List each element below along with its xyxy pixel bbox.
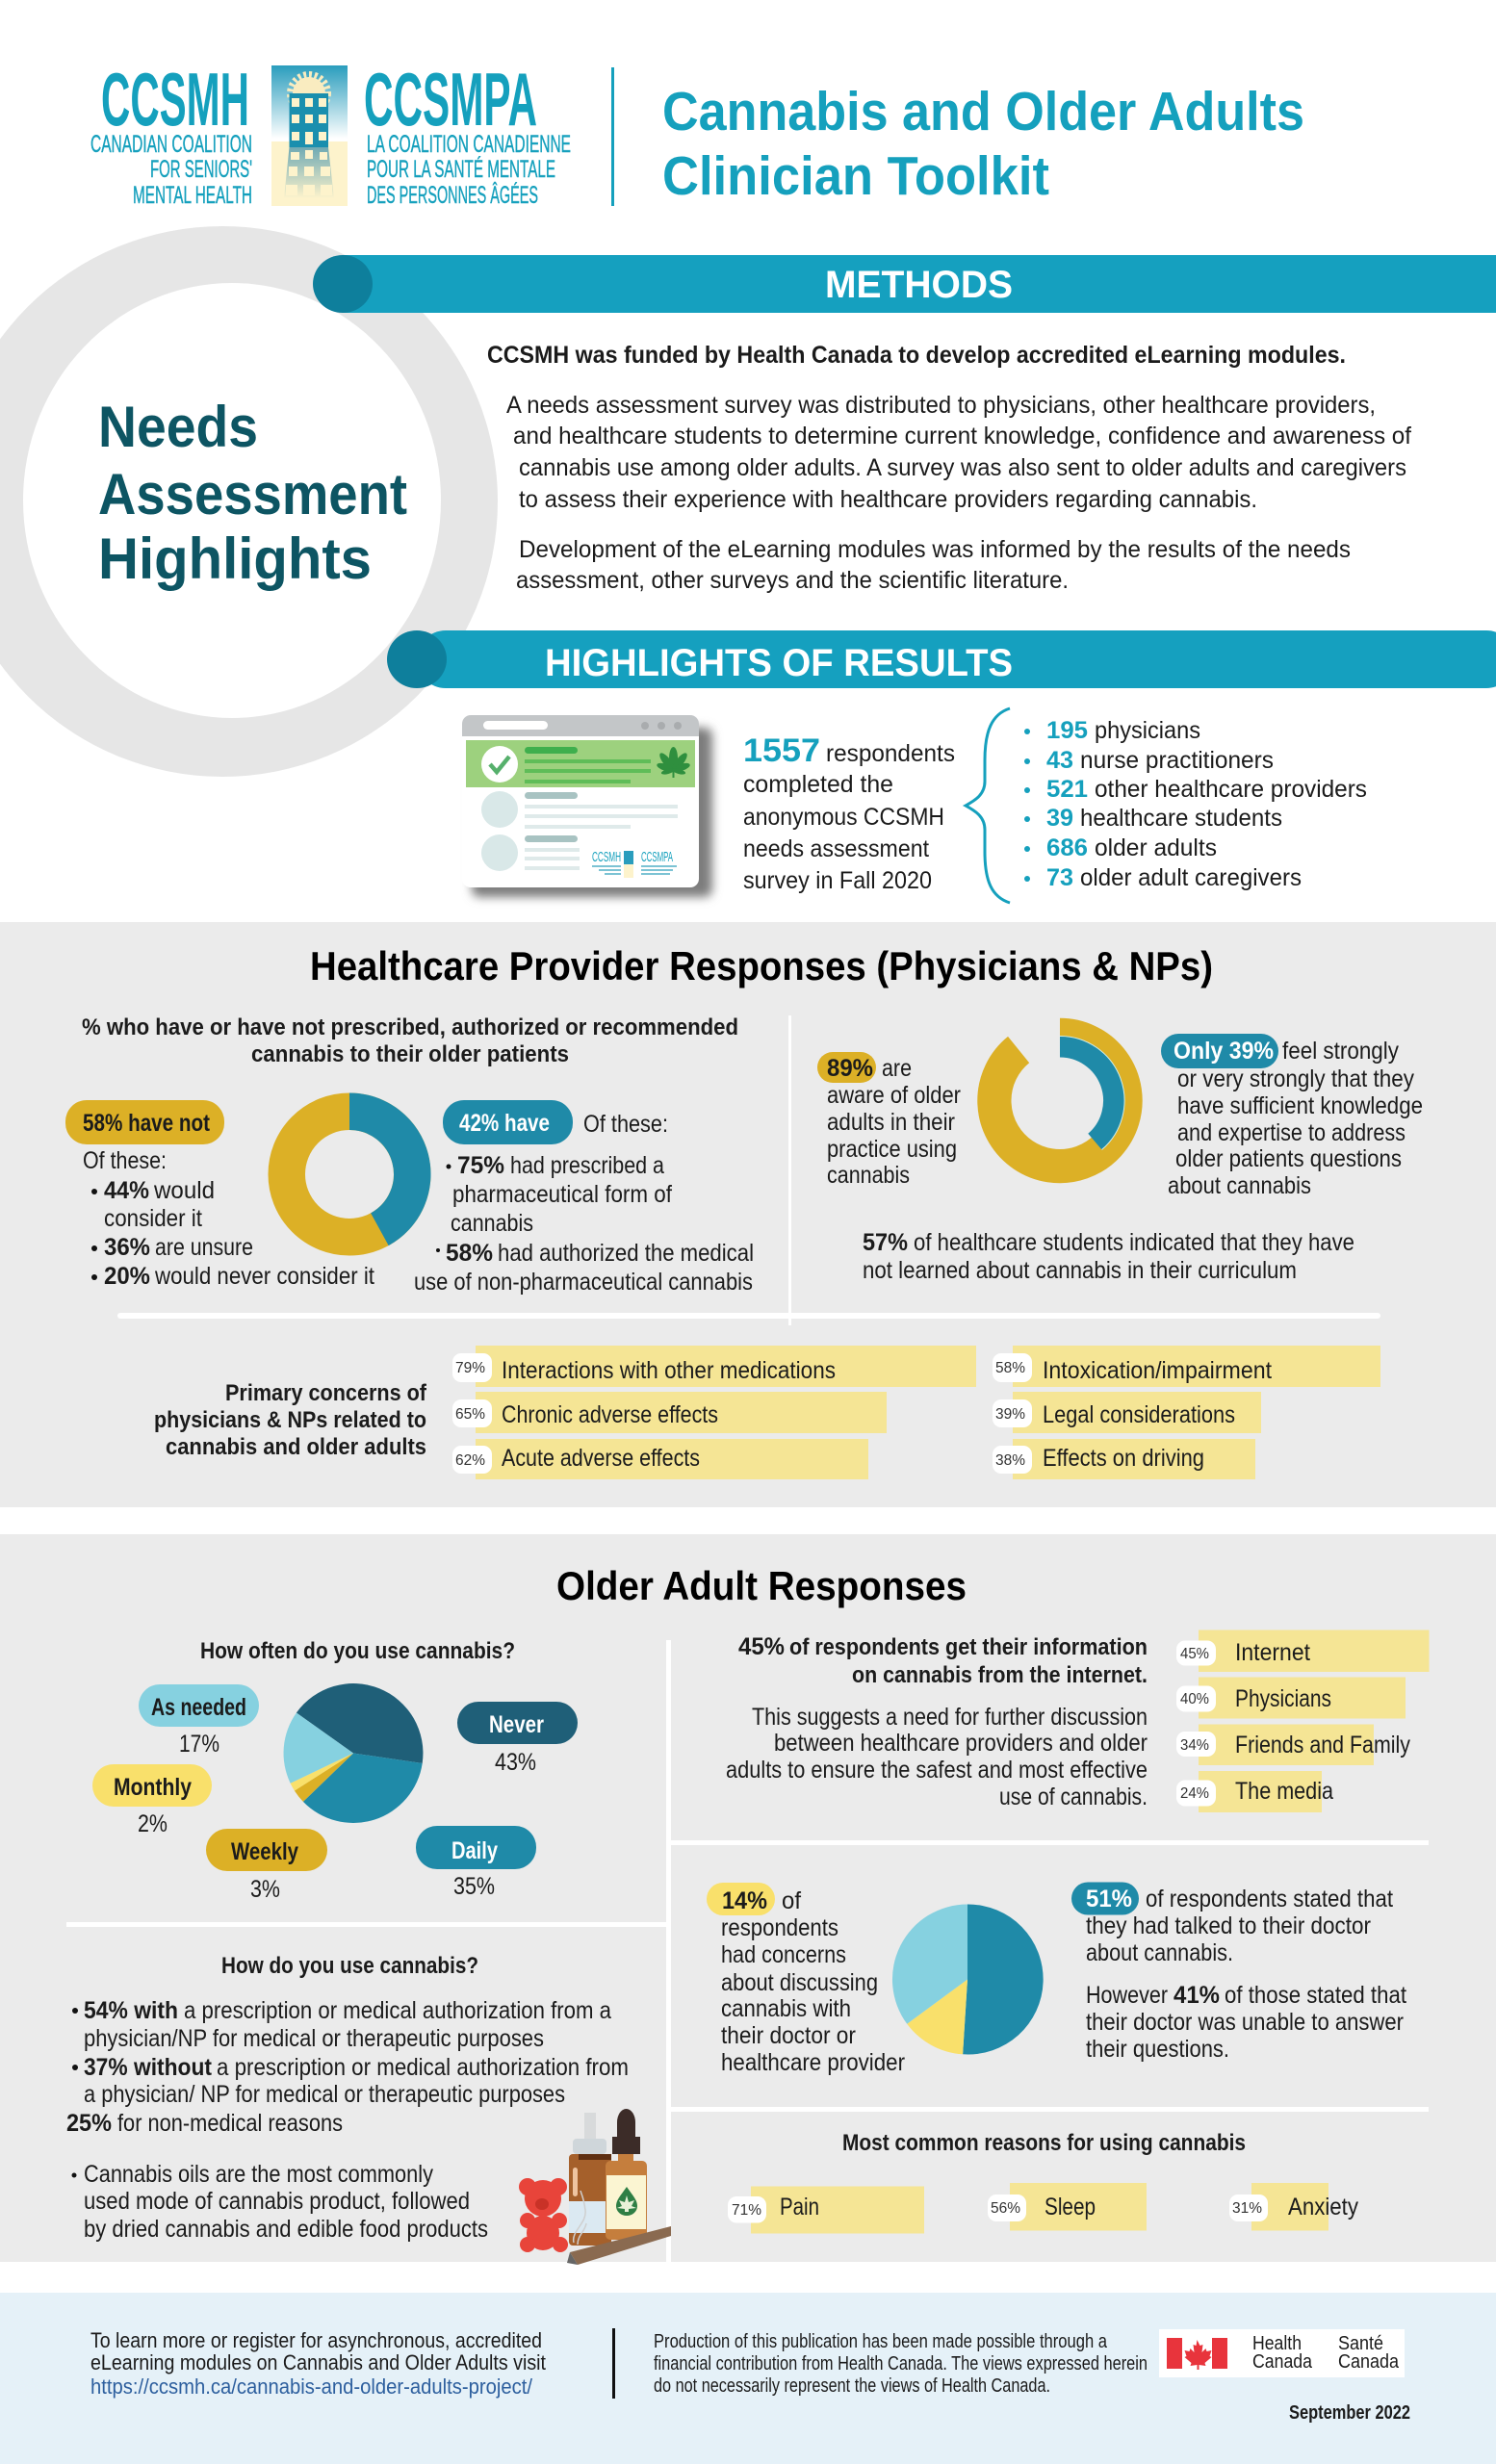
bar chart: information sources: 34% [1180, 1737, 1209, 1754]
banner: highlights of results: HIGHLIGHTS OF RESULTS [545, 642, 1013, 684]
text: 14% concerns: about discussing [721, 1969, 878, 1996]
respondent breakdown list: 73 [1046, 864, 1073, 891]
text: 45% internet: between healthcare providers and older [774, 1730, 1148, 1757]
text: 51% talked to doctor: 41% [1174, 1982, 1220, 2009]
legend: as needed: As needed [151, 1694, 246, 1721]
legend: monthly: 2% [138, 1810, 168, 1837]
bar chart: primary concerns: 65% [455, 1406, 485, 1423]
heading: Needs Assessment Highlights: Highlights [98, 526, 372, 591]
text: 45% internet: use of cannabis. [999, 1784, 1148, 1810]
bar chart: primary concerns: Legal considerations [1043, 1401, 1235, 1428]
respondent breakdown list: 39 [1046, 805, 1073, 832]
text: learn more: To learn more or register for asynchronous, accredited [90, 2328, 542, 2352]
respondent breakdown list: older adult caregivers [1080, 864, 1302, 891]
text: 89% aware [817, 1052, 961, 1189]
legend: daily [416, 1826, 536, 1900]
title: Cannabis and Older Adults Clinician Toolkit: Clinician Toolkit [662, 145, 1049, 207]
icon: survey window: CCSMPA [641, 849, 673, 865]
text: 14% concerns: healthcare provider [721, 2049, 905, 2076]
respondent breakdown list: 195 [1046, 717, 1088, 744]
icon: gummy bear [519, 2178, 568, 2252]
text: 51% talked to doctor: their questions. [1086, 2036, 1229, 2063]
text: only 39%: about cannabis [1168, 1172, 1311, 1199]
methods text: Development of the eLearning modules was informed by the results of the needs [519, 536, 1351, 563]
text: 89% aware: 89% [827, 1055, 873, 1082]
bar chart: reasons: Pain [780, 2194, 819, 2220]
panel: older adult responses [0, 1534, 1496, 2265]
list: have: Of these: [583, 1111, 668, 1138]
header logo: CCSMH / CCSMPA: MENTAL HEALTH [133, 182, 252, 209]
pie chart: doctor discussion [892, 1904, 1044, 2054]
legend: as needed: 17% [179, 1731, 219, 1758]
text: learn more: eLearning modules on Cannabis and Older Adults visit [90, 2350, 546, 2374]
text: 51% talked to doctor: they had talked to their doctor [1086, 1912, 1371, 1939]
legend: never [457, 1702, 578, 1776]
heading: Needs Assessment Highlights: Assessment [98, 462, 407, 526]
bar chart: primary concerns: Interactions with other medications [502, 1357, 836, 1384]
label: primary concerns: physicians & NPs related to [154, 1407, 426, 1433]
list: have not: Of these: [83, 1147, 167, 1174]
text: 89% aware: are [882, 1055, 912, 1082]
list: have not: 44% [104, 1177, 149, 1204]
label: primary concerns: cannabis and older adults [166, 1434, 426, 1460]
donut chart: 58 / 42 [287, 1112, 412, 1237]
bar chart: primary concerns [452, 1346, 1380, 1479]
text: 57% of healthcare students: 57% [863, 1229, 908, 1256]
list: have not [83, 1147, 374, 1290]
list: have not: would [153, 1177, 215, 1204]
text: funding disclaimer [654, 2331, 1148, 2397]
text: 51% talked to doctor: of those stated that [1225, 1982, 1406, 2009]
subheading: how do you use: How do you use cannabis? [221, 1953, 478, 1979]
respondent breakdown list: older adults [1095, 834, 1217, 861]
text: 1557 respondents: survey in Fall 2020 [743, 867, 932, 894]
legend: daily: Daily [451, 1837, 498, 1864]
header logo: CCSMH / CCSMPA [90, 57, 571, 209]
banner: methods [313, 255, 1496, 313]
badge: 42% have: 42% have [459, 1110, 550, 1137]
respondent breakdown list: nurse practitioners [1080, 747, 1274, 774]
text: 14% concerns: of [782, 1887, 801, 1914]
legend: never: Never [489, 1711, 544, 1738]
bar chart: primary concerns: 79% [455, 1360, 485, 1376]
text: 51% talked to doctor: about cannabis. [1086, 1939, 1233, 1966]
bar chart: information sources: Friends and Family [1235, 1732, 1410, 1758]
text: 51% talked to doctor: their doctor was unable to answer [1086, 2009, 1404, 2036]
text: 89% aware: practice using [827, 1136, 957, 1163]
donut chart: 89% and 39% [994, 1035, 1125, 1167]
text: 51% talked to doctor: 51% [1086, 1886, 1132, 1912]
text: only 39%: or very strongly that they [1177, 1065, 1414, 1092]
bar chart: primary concerns: 39% [995, 1406, 1025, 1423]
bar chart: information sources: Physicians [1235, 1685, 1331, 1712]
text: 1557 respondents: 1557 [743, 732, 820, 769]
methods text: assessment, other surveys and the scientific literature. [516, 567, 1069, 594]
bar chart: primary concerns: 38% [995, 1452, 1025, 1469]
header logo: CCSMH / CCSMPA: DES PERSONNES ÂGÉES [367, 181, 538, 209]
icon: spray bottle [569, 2113, 611, 2246]
text: modes of use: a physician/ NP for medical or therapeutic purposes [84, 2081, 565, 2108]
logo: Health Canada: Canada [1338, 2351, 1400, 2373]
respondent breakdown list: 686 [1046, 834, 1088, 861]
header logo: CCSMH / CCSMPA: CANADIAN COALITION [90, 131, 252, 158]
text: 45% internet [726, 1633, 1148, 1810]
text: 89% aware: aware of older [827, 1082, 961, 1109]
text: 14% concerns [707, 1883, 905, 2076]
list: have: had authorized the medical [498, 1240, 754, 1267]
legend: monthly [92, 1764, 212, 1837]
respondent breakdown list: other healthcare providers [1095, 776, 1367, 803]
header logo: CCSMH / CCSMPA: CCSMH [101, 57, 249, 141]
text: only 39%: have sufficient knowledge [1177, 1092, 1423, 1119]
respondent breakdown list: physicians [1095, 717, 1200, 744]
legend: daily: 35% [453, 1873, 495, 1900]
methods text: to assess their experience with healthcare providers regarding cannabis. [519, 486, 1257, 513]
respondent breakdown list [1024, 717, 1367, 891]
header logo: CCSMH / CCSMPA: LA COALITION CANADIENNE [367, 131, 571, 158]
bar chart: reasons: Sleep [1045, 2194, 1096, 2220]
list: have not: would never consider it [154, 1263, 374, 1290]
list: have: use of non-pharmaceutical cannabis [414, 1269, 753, 1296]
legend: weekly [206, 1829, 327, 1903]
header logo: CCSMH / CCSMPA: POUR LA SANTÉ MENTALE [367, 155, 555, 183]
footer [0, 2293, 1496, 2464]
icon: survey window [462, 715, 712, 897]
panel: healthcare provider responses [0, 922, 1496, 1507]
bar chart: primary concerns: Chronic adverse effects [502, 1401, 718, 1428]
list: have: cannabis [451, 1210, 533, 1237]
list: have: had prescribed a [510, 1152, 664, 1179]
text: modes of use: 54% with [84, 1997, 178, 2024]
respondent breakdown list: healthcare students [1080, 805, 1282, 832]
text: only 39%: older patients questions [1175, 1145, 1402, 1172]
text: 45% internet: adults to ensure the safest and most effective [726, 1757, 1148, 1784]
bar chart: information sources: 24% [1180, 1785, 1209, 1802]
label: primary concerns: Primary concerns of [225, 1380, 427, 1406]
list: have not: 20% [104, 1263, 150, 1290]
text: only 39% [1161, 1034, 1423, 1199]
methods text: CCSMH was funded by Health Canada to develop accredited eLearning modules. [487, 342, 1346, 369]
text: 1557 respondents: respondents [826, 740, 955, 767]
text: 89% aware: cannabis [827, 1162, 910, 1189]
list: have: 75% [457, 1152, 504, 1179]
text: 51% talked to doctor: However [1086, 1982, 1168, 2009]
respondent breakdown list: 43 [1046, 747, 1073, 774]
legend: weekly: Weekly [231, 1838, 298, 1865]
legend: never: 43% [495, 1749, 536, 1776]
list: have: pharmaceutical form of [452, 1181, 672, 1208]
text: 57% of healthcare students: of healthcare students indicated that they have [914, 1229, 1354, 1256]
banner: methods: METHODS [825, 264, 1013, 306]
text: modes of use: 25% [66, 2110, 112, 2137]
bar chart: reasons: Anxiety [1288, 2194, 1358, 2220]
text: 1557 respondents: needs assessment [743, 835, 929, 862]
bar chart: information sources: 45% [1180, 1646, 1209, 1662]
heading: older adult responses: Older Adult Responses [556, 1563, 967, 1608]
text: 89% aware: adults in their [827, 1109, 955, 1136]
bar chart: reasons: 71% [732, 2202, 761, 2219]
text: 14% concerns: their doctor or [721, 2022, 856, 2049]
text: funding disclaimer: financial contribution from Health Canada. The views expressed herein [654, 2353, 1148, 2374]
bar chart: primary concerns: Acute adverse effects [502, 1445, 700, 1472]
list: have not: consider it [104, 1205, 202, 1232]
text: 1557 respondents: completed the [743, 771, 893, 798]
text: only 39%: Only 39% [1174, 1038, 1274, 1065]
bar chart: primary concerns: 58% [995, 1360, 1025, 1376]
text: 45% internet: of respondents get their information [789, 1634, 1148, 1660]
text: 14% concerns: 14% [722, 1887, 767, 1914]
text: 57% of healthcare students: not learned about cannabis in their curriculum [863, 1257, 1297, 1284]
bar chart: primary concerns: 62% [455, 1452, 485, 1469]
logo: Health Canada: Canada [1252, 2351, 1313, 2373]
title: Cannabis and Older Adults Clinician Toolkit: Cannabis and Older Adults [662, 81, 1304, 142]
text: 1557 respondents [743, 732, 955, 894]
icon: dropper bottle [606, 2109, 647, 2240]
text: modes of use: a prescription or medical authorization from a [184, 1997, 611, 2024]
text: 57% of healthcare students [863, 1229, 1354, 1284]
methods text: and healthcare students to determine current knowledge, confidence and awareness of [513, 423, 1411, 449]
header logo: CCSMH / CCSMPA: CCSMPA [364, 57, 537, 141]
text: modes of use [66, 1997, 629, 2243]
bar chart: information sources: 40% [1180, 1691, 1209, 1707]
badge: 58% have not: 58% have not [83, 1110, 211, 1137]
list: have [414, 1111, 754, 1296]
bar chart: information sources: Internet [1235, 1639, 1310, 1666]
bar chart: reasons: 56% [991, 2200, 1020, 2217]
logo: Health Canada: Health [1252, 2333, 1302, 2354]
text: modes of use: for non-medical reasons [117, 2110, 343, 2137]
text: 45% internet: on cannabis from the internet. [852, 1662, 1148, 1688]
legend: as needed [139, 1684, 259, 1758]
text: 14% concerns: cannabis with [721, 1995, 851, 2022]
text: modes of use: a prescription or medical authorization from [217, 2054, 629, 2081]
bar chart: reasons [728, 2183, 1358, 2233]
icon: joint [567, 2226, 671, 2265]
icon: survey window: CCSMH [592, 849, 621, 865]
text: learn more: https://ccsmh.ca/cannabis-and-older-adults-project/ [90, 2374, 533, 2399]
bar chart: information sources [1176, 1630, 1429, 1812]
list: have not: 36% [104, 1234, 150, 1261]
list: have: 58% [446, 1240, 493, 1267]
methods text: A needs assessment survey was distributed to physicians, other healthcare providers, [506, 392, 1376, 419]
text: learn more [90, 2328, 546, 2399]
title: Cannabis and Older Adults Clinician Toolkit [662, 81, 1304, 207]
badge: 58% have not [65, 1100, 224, 1144]
legend: monthly: Monthly [114, 1774, 192, 1801]
illustration: cannabis products [519, 2109, 671, 2265]
text: modes of use: Cannabis oils are the most commonly [84, 2161, 433, 2188]
subheading: most common reasons: Most common reasons for using cannabis [842, 2130, 1246, 2156]
text: modes of use: used mode of cannabis product, followed [84, 2188, 470, 2215]
text: 1557 respondents: anonymous CCSMH [743, 804, 944, 831]
text: 45% internet: 45% [738, 1633, 785, 1660]
subheading: prescribed or not: cannabis to their older patients [251, 1041, 569, 1067]
text: only 39%: and expertise to address [1177, 1119, 1406, 1146]
methods text: cannabis use among older adults. A survey was also sent to older adults and caregivers [519, 454, 1406, 481]
header logo: CCSMH / CCSMPA: FOR SENIORS' [150, 156, 252, 183]
text: 45% internet: This suggests a need for further discussion [752, 1704, 1148, 1731]
text: funding disclaimer: Production of this publication has been made possible through a [654, 2331, 1108, 2352]
text: 51% talked to doctor [1071, 1883, 1406, 2063]
subheading: how often: How often do you use cannabis? [200, 1638, 515, 1664]
bar chart: primary concerns: Intoxication/impairment [1043, 1357, 1272, 1384]
bar chart: reasons: 31% [1232, 2200, 1262, 2217]
list: have not: are unsure [155, 1234, 253, 1261]
banner: highlights of results [387, 630, 1496, 688]
subheading: prescribed or not: % who have or have not prescribed, authorized or recommended [82, 1014, 738, 1040]
legend: weekly: 3% [250, 1876, 280, 1903]
text: modes of use: physician/NP for medical or therapeutic purposes [84, 2025, 544, 2052]
bar chart: information sources: The media [1235, 1778, 1333, 1805]
bar chart: primary concerns: Effects on driving [1043, 1445, 1204, 1472]
pie chart: frequency of use [284, 1683, 423, 1823]
heading: Needs Assessment Highlights [98, 395, 407, 591]
text: 51% talked to doctor: of respondents stated that [1146, 1886, 1393, 1912]
subheading: prescribed or not [82, 1014, 738, 1067]
respondent breakdown list: 521 [1046, 776, 1088, 803]
badge: 42% have [443, 1100, 573, 1144]
grey ring behind heading [0, 226, 498, 777]
heading: Needs Assessment Highlights: Needs [98, 395, 258, 459]
logo: Health Canada [1159, 2329, 1405, 2377]
date: September 2022 [1289, 2402, 1410, 2424]
brace [966, 708, 1010, 903]
logo: Health Canada: Santé [1338, 2333, 1383, 2354]
text: 14% concerns: had concerns [721, 1941, 846, 1968]
text: only 39%: feel strongly [1282, 1038, 1399, 1065]
text: funding disclaimer: do not necessarily represent the views of Health Canada. [654, 2375, 1050, 2397]
methods text [487, 342, 1411, 594]
text: 14% concerns: respondents [721, 1914, 838, 1941]
heading: healthcare provider responses: Healthcare Provider Responses (Physicians & NPs) [310, 943, 1213, 988]
text: modes of use: by dried cannabis and edible food products [84, 2216, 488, 2243]
label: primary concerns [154, 1380, 427, 1460]
text: modes of use: 37% without [84, 2054, 213, 2081]
